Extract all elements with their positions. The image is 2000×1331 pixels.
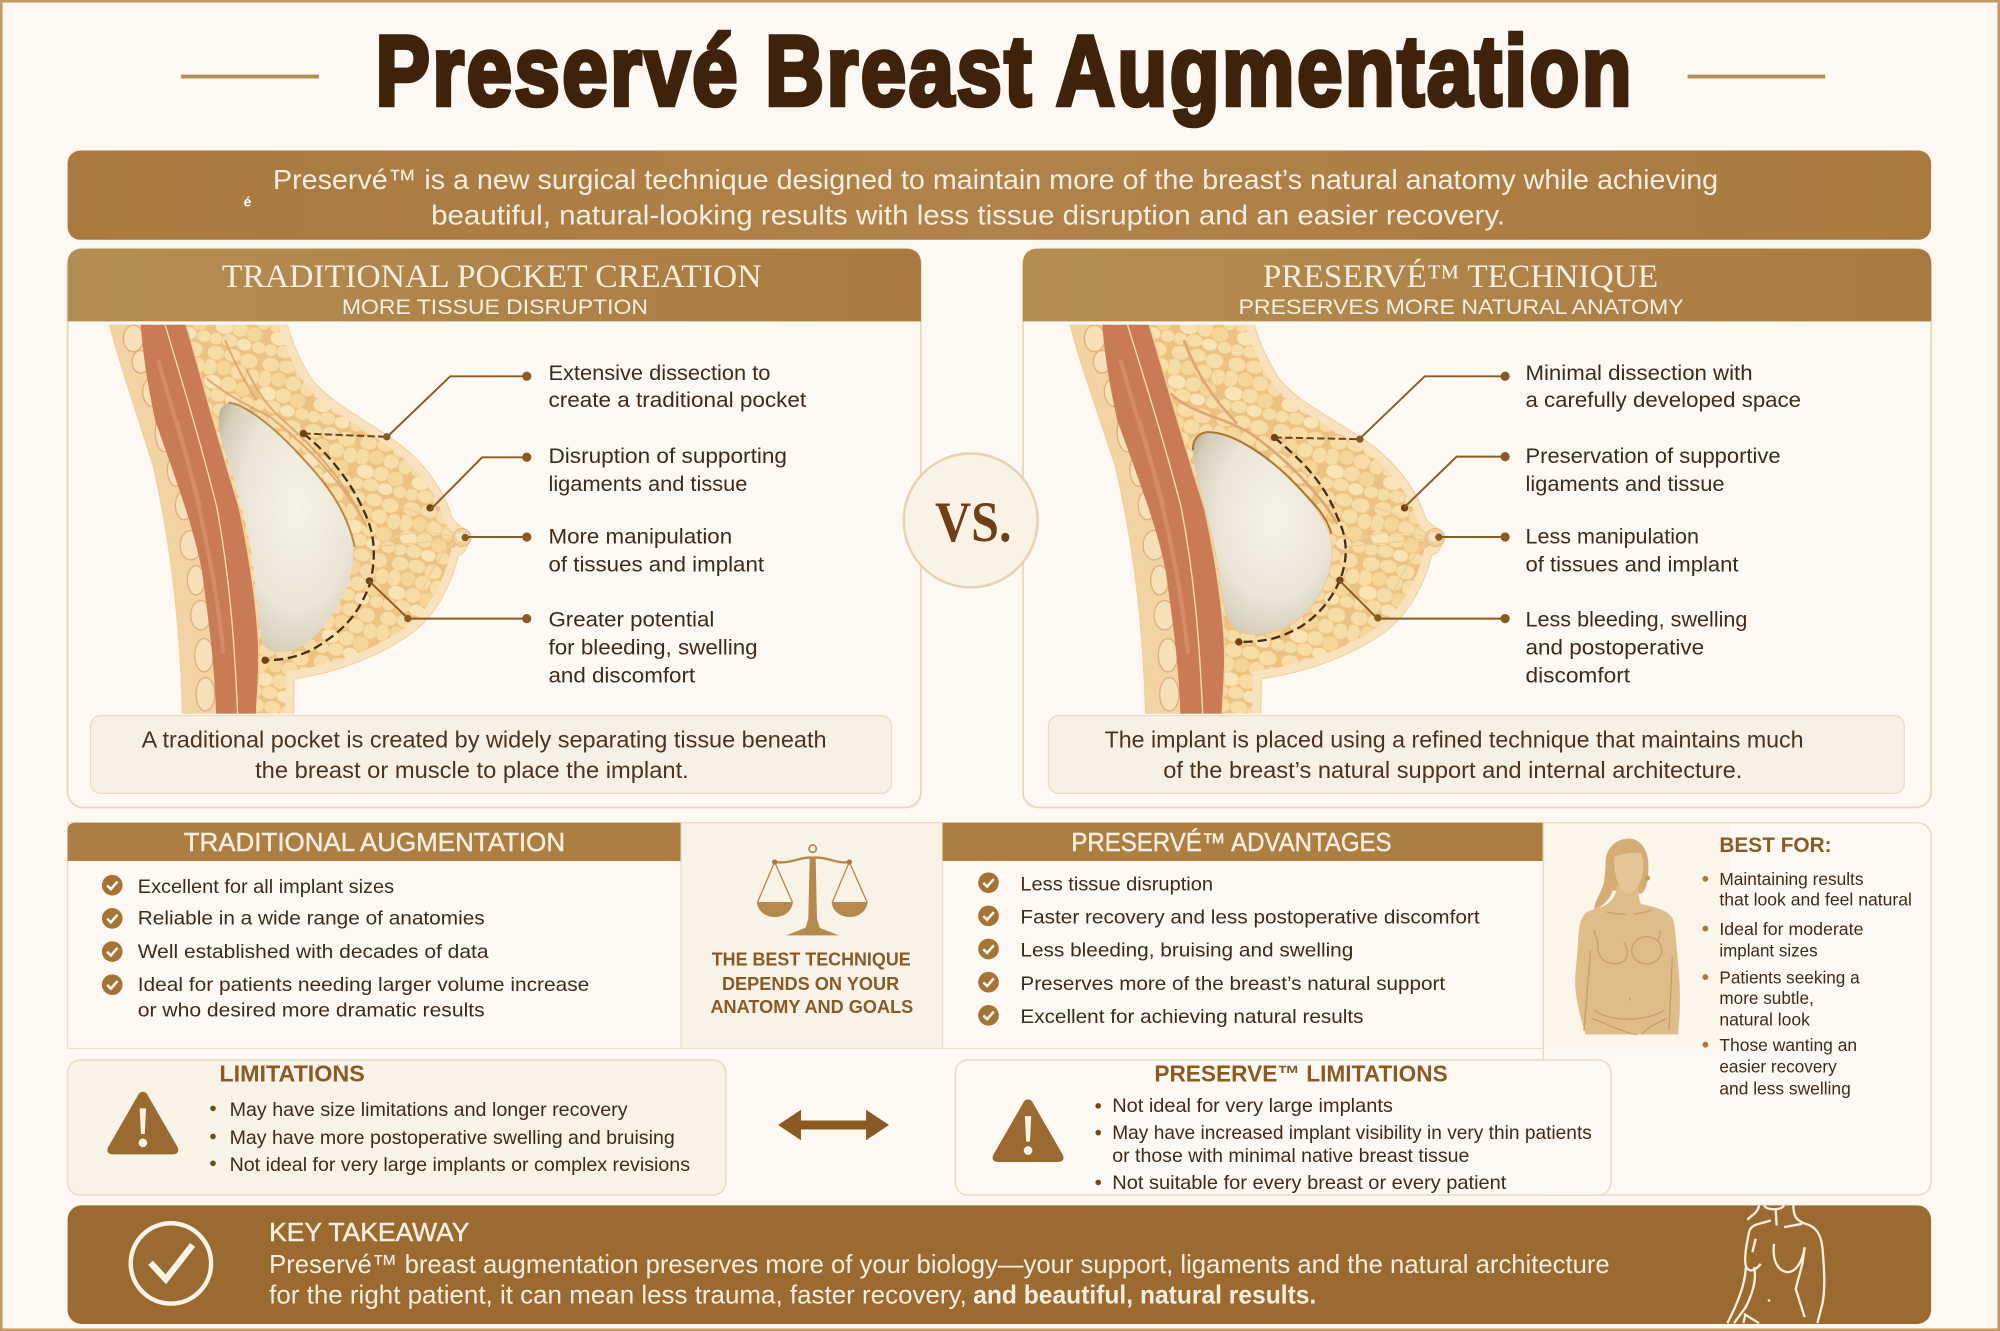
heading: traditional augmentation <box>68 823 681 861</box>
icon: woman figure <box>1575 839 1680 1034</box>
callout list: traditional: and discomfort <box>548 662 695 687</box>
title: Preservé Breast Augmentation <box>375 16 1632 127</box>
callout list: traditional: Disruption of supporting <box>548 443 787 468</box>
text: best technique depends <box>710 949 913 1017</box>
heading: preserve advantages: PRESERVÉ™ ADVANTAGES <box>1071 828 1392 857</box>
callout list: preserve: discomfort <box>1526 662 1630 687</box>
callout list: traditional: Extensive dissection to <box>548 360 770 385</box>
checklist: traditional: Ideal for patients needing larger volume increase <box>138 974 589 996</box>
panel: preserve advantages <box>943 823 1543 1048</box>
icon: balance scales <box>757 845 868 935</box>
callout list: preserve: and postoperative <box>1526 634 1704 659</box>
checklist: preserve: Excellent for achieving natural results <box>1020 1006 1364 1028</box>
text: key takeaway <box>269 1219 1610 1310</box>
text: key takeaway: and beautiful, natural results. <box>973 1280 1316 1310</box>
note box: traditional: the breast or muscle to place the implant. <box>255 757 689 783</box>
panel header: preserve: PRESERVÉ™ TECHNIQUE <box>1263 258 1658 295</box>
text: best technique depends: ANATOMY AND GOALS <box>710 996 913 1017</box>
callout list: preserve: Preservation of supportive <box>1526 443 1781 468</box>
callout list: traditional: ligaments and tissue <box>548 471 747 496</box>
vs badge: VS. <box>935 491 1011 554</box>
anatomy illustration: traditional pocket <box>100 303 500 737</box>
panel: preserve technique <box>1023 249 1931 807</box>
checklist: traditional: Reliable in a wide range of anatomies <box>138 908 485 930</box>
checklist: preserve: Less tissue disruption <box>1020 873 1213 895</box>
bullet list: best for <box>1702 869 1912 1098</box>
panel: best technique <box>681 823 943 1048</box>
callout list: preserve <box>1526 360 1801 687</box>
bullet list: best for: easier recovery <box>1719 1057 1837 1077</box>
anatomy illustration: preserve <box>1060 303 1475 737</box>
patch behind figure <box>1545 824 1730 1048</box>
icon: body line art <box>1727 1205 1824 1323</box>
checklist: preserve: Preserves more of the breast’s natural support <box>1020 973 1446 995</box>
heading: traditional augmentation: TRADITIONAL AUGMENTATION <box>184 829 565 857</box>
callout list: traditional: create a traditional pocket <box>548 387 806 412</box>
panel: limitations <box>68 1060 726 1195</box>
checklist: traditional: Well established with decades of data <box>138 941 489 963</box>
heading: preserve advantages <box>943 823 1543 861</box>
bullet list: preserve limitations <box>1095 1096 1592 1194</box>
panel header: preserve <box>1023 249 1931 321</box>
checklist: traditional <box>102 875 589 1022</box>
bullet list: best for: Ideal for moderate <box>1719 919 1864 939</box>
bullet list: preserve limitations: May have increased implant visibility in very thin patients <box>1112 1123 1592 1144</box>
bullet list: best for: that look and feel natural <box>1719 890 1912 910</box>
heading: limitations: LIMITATIONS <box>219 1061 365 1087</box>
bullet list: limitations <box>210 1100 690 1176</box>
callout list: preserve: a carefully developed space <box>1526 387 1801 412</box>
arrow: double headed <box>778 1110 889 1140</box>
callout list: preserve: Less manipulation <box>1526 523 1699 548</box>
note box: traditional: A traditional pocket is created by widely separating tissue beneath <box>142 726 827 752</box>
checklist: traditional: or who desired more dramatic results <box>138 1000 485 1022</box>
callout list: preserve: of tissues and implant <box>1526 551 1739 576</box>
intro banner: é <box>244 194 251 210</box>
bullet list: preserve limitations: Not ideal for very large implants <box>1112 1096 1393 1117</box>
text: key takeaway: for the right patient, it can mean less trauma, faster recovery, <box>269 1280 967 1310</box>
callout list: traditional: Greater potential <box>548 606 714 631</box>
text: key takeaway: KEY TAKEAWAY <box>269 1219 469 1247</box>
panel: traditional augmentation <box>68 823 681 1048</box>
checklist: traditional: Excellent for all implant sizes <box>138 876 394 898</box>
checklist: preserve: Less bleeding, bruising and swelling <box>1020 940 1353 962</box>
panel header: preserve: PRESERVES MORE NATURAL ANATOMY <box>1239 294 1684 319</box>
bullet list: limitations: May have more postoperative swelling and bruising <box>230 1128 675 1149</box>
icon: warning triangle <box>993 1099 1064 1162</box>
note box: preserve: The implant is placed using a refined technique that maintains much <box>1105 726 1804 752</box>
icon: check circle <box>131 1223 211 1304</box>
callout list: preserve: Minimal dissection with <box>1526 360 1753 385</box>
heading: preserve limitations: PRESERVE™ LIMITATIONS <box>1154 1061 1448 1087</box>
intro banner <box>68 151 1931 240</box>
heading: best for: BEST FOR: <box>1719 834 1832 857</box>
note box: traditional <box>91 716 892 793</box>
checklist: preserve <box>978 872 1480 1028</box>
text: best technique depends: THE BEST TECHNIQUE <box>712 949 911 970</box>
checklist: preserve: Faster recovery and less postoperative discomfort <box>1020 906 1480 928</box>
text: best technique depends: DEPENDS ON YOUR <box>722 973 899 994</box>
bullet list: best for: natural look <box>1719 1010 1810 1030</box>
leader lines: traditional <box>369 372 531 623</box>
callout list: traditional: More manipulation <box>548 523 732 548</box>
panel: preserve limitations <box>955 1060 1611 1195</box>
vs badge <box>904 453 1038 587</box>
callout list: traditional <box>548 360 806 687</box>
callout list: traditional: of tissues and implant <box>548 551 764 576</box>
bullet list: best for: more subtle, <box>1719 988 1814 1008</box>
text: key takeaway: Preservé™ breast augmentation preserves more of your biology—your support, ligaments and the natural architecture <box>269 1249 1610 1279</box>
callout list: preserve: Less bleeding, swelling <box>1526 606 1747 631</box>
note box: preserve <box>1048 716 1904 793</box>
bullet list: best for: Maintaining results <box>1719 869 1864 889</box>
intro banner: Preservé™ is a new surgical technique designed to maintain more of the breast’s natural anatomy while achieving <box>273 164 1718 195</box>
bullet list: best for: Those wanting an <box>1719 1035 1857 1055</box>
key takeaway banner <box>68 1205 1931 1324</box>
panel header: traditional: TRADITIONAL POCKET CREATION <box>222 258 762 295</box>
bullet list: limitations: Not ideal for very large implants or complex revisions <box>230 1155 690 1176</box>
icon: warning triangle <box>107 1092 178 1154</box>
panel: traditional pocket creation <box>68 249 921 807</box>
leader lines: preserve <box>1339 372 1510 623</box>
note box: preserve: of the breast’s natural support and internal architecture. <box>1163 757 1742 783</box>
panel: best for <box>1543 823 1931 1195</box>
callout list: traditional: for bleeding, swelling <box>548 634 758 659</box>
bullet list: limitations: May have size limitations and longer recovery <box>230 1100 628 1121</box>
panel header: traditional <box>68 249 921 321</box>
bullet list: best for: and less swelling <box>1719 1078 1851 1098</box>
panel header: traditional: MORE TISSUE DISRUPTION <box>342 294 648 319</box>
bullet list: preserve limitations: Not suitable for every breast or every patient <box>1112 1173 1507 1194</box>
intro banner: beautiful, natural-looking results with less tissue disruption and an easier recovery. <box>431 199 1505 230</box>
callout list: preserve: ligaments and tissue <box>1526 471 1724 496</box>
bullet list: preserve limitations: or those with minimal native breast tissue <box>1112 1146 1469 1167</box>
bullet list: best for: implant sizes <box>1719 941 1818 961</box>
bullet list: best for: Patients seeking a <box>1719 967 1860 987</box>
